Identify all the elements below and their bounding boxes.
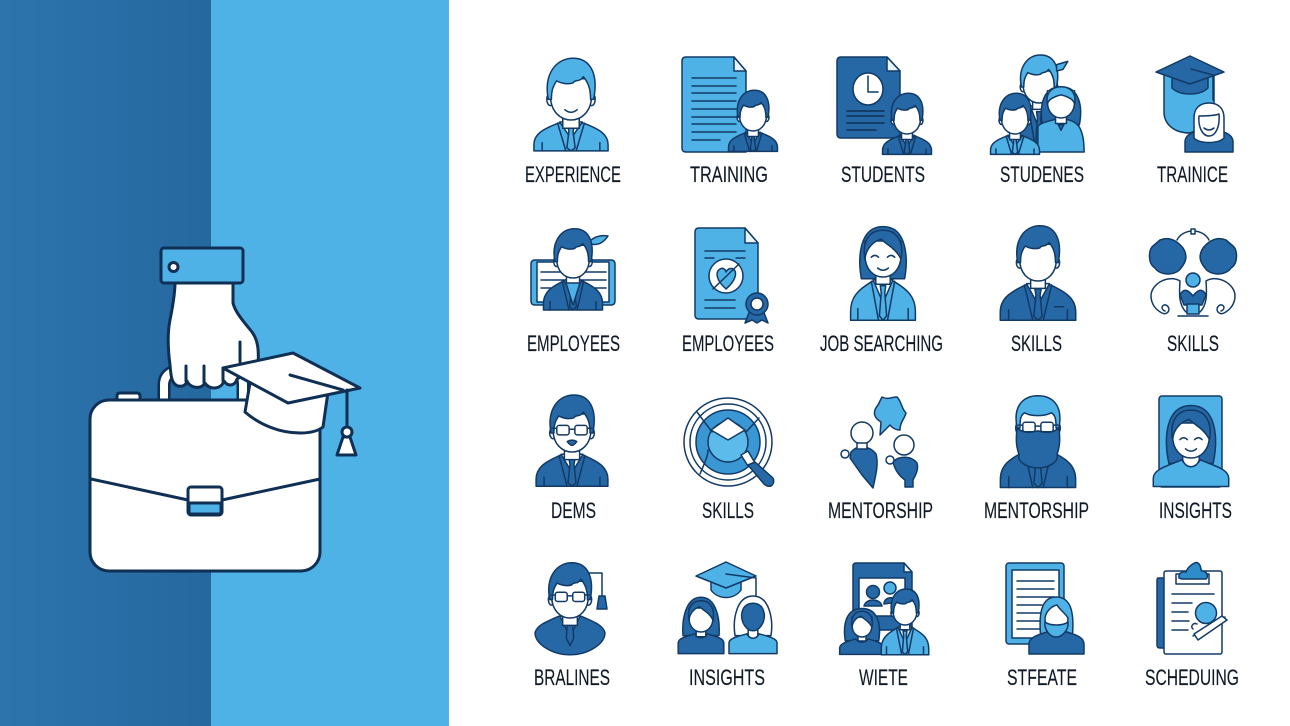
icon: graduation cap with two women [678,562,777,654]
cell: scheduing [1145,563,1239,690]
cell: skills 1 [1000,226,1076,356]
cell: mentorship 1 [828,397,933,523]
label: EXPERIENCE [525,162,621,187]
cell: mentorship 2 [984,396,1089,523]
briefcase tab [117,393,140,400]
label: SCHEDUING [1145,665,1239,690]
icon: group of three people [991,55,1084,154]
label: DEMS [551,498,596,523]
cell: skills 2 [1149,229,1237,356]
icon: woman portrait [1153,396,1229,487]
icon: clipboard with magnifier and pen [1157,563,1227,654]
label: SKILLS [702,498,754,523]
cell: insights 2 [678,562,777,690]
cell: training [682,57,777,187]
icon: clock document with person [837,57,931,154]
cell: experience [525,58,621,187]
cell: trainice [1156,56,1233,187]
icon: two clouds and figure with swirls [1149,229,1237,316]
icon: man in dark suit [1000,226,1076,320]
graduation cap [223,353,360,455]
icon: smiling woman [851,227,915,320]
label: STUDENTS [841,162,925,187]
label: MENTORSHIP [984,498,1089,523]
cell: employees 2 [682,228,774,356]
cell: job searching [820,227,943,356]
icon: graduate man with glasses and tassel [535,563,607,655]
label: INSIGHTS [689,665,765,690]
icon: graduation cap, gown and woman [1156,56,1233,152]
label: STFEATE [1007,665,1077,690]
cell: students [837,57,931,187]
label: INSIGHTS [1159,498,1232,523]
icon: man with glasses and moustache [536,395,608,486]
briefcase handle [164,371,243,402]
hand [168,283,258,388]
cell: wiete [840,563,929,690]
label: JOB SEARCHING [820,331,943,356]
icon: certificate document with rosette [695,228,768,323]
label: WIETE [859,665,908,690]
icon: man in light suit [534,58,608,151]
cell: stfeate [1006,563,1084,690]
cell: studenes [991,55,1084,187]
shirt cuff [161,248,243,283]
icon: bearded man with glasses [1000,396,1076,487]
icon: two figures and speech bubble [841,397,918,488]
cell: employees 1 [527,229,620,356]
icon: man in front of open book [531,229,615,310]
cell: skills 3 [684,398,774,523]
icon: document with person [682,57,777,152]
label: SKILLS [1011,331,1062,356]
icon: presentation document with two people [840,563,929,655]
label: TRAINICE [1157,162,1228,187]
label: EMPLOYEES [682,331,774,356]
label: TRAINING [690,162,768,187]
briefcase body [90,400,320,571]
cell: insights 1 [1153,396,1232,523]
icon: tablet document with bearded person [1006,563,1084,654]
icon: target with magnifier [684,398,774,486]
label: STUDENES [1000,162,1084,187]
cell: bralines [534,563,610,690]
label: BRALINES [534,665,610,690]
label: EMPLOYEES [527,331,620,356]
illustration: hand holding briefcase with graduation cap [90,248,360,571]
label: SKILLS [1167,331,1219,356]
cell: dems [536,395,608,523]
label: MENTORSHIP [828,498,933,523]
